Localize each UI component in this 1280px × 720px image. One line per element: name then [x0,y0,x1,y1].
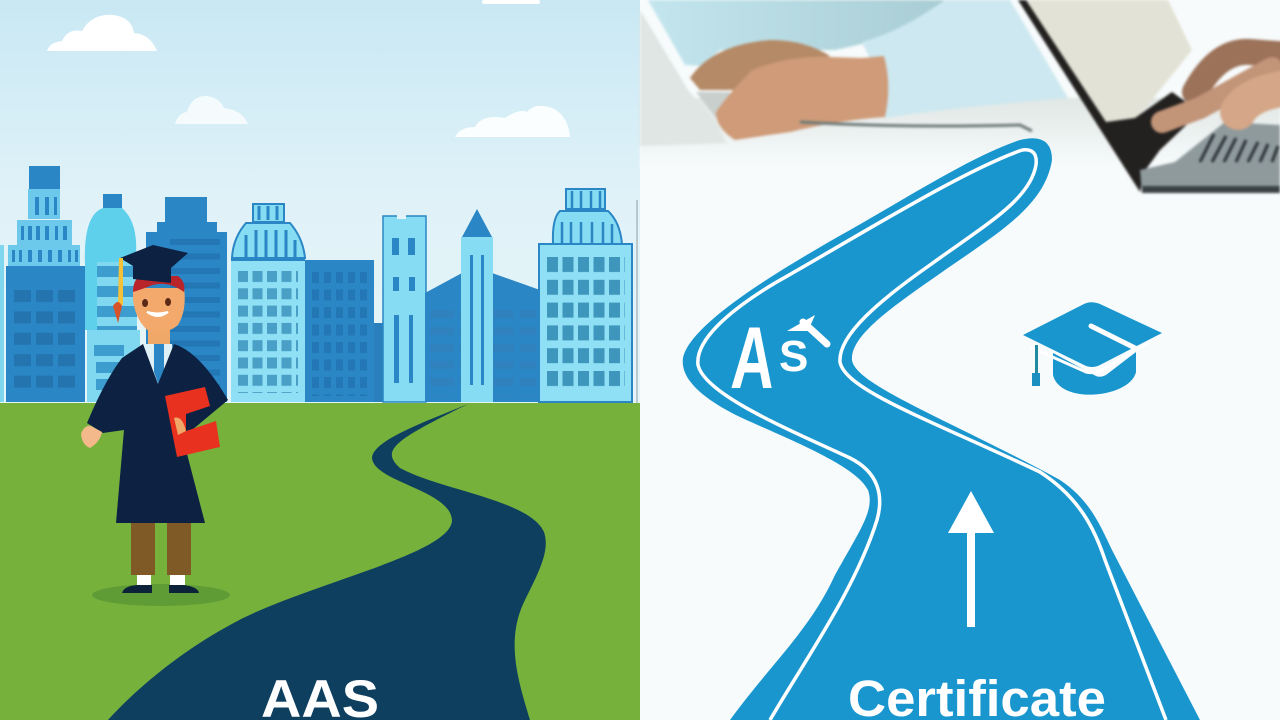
socks [137,575,185,585]
building 8 [539,189,632,402]
road glyph: AS with arrow [729,309,827,407]
icon: graduation cap [1023,302,1162,395]
necktie [154,344,164,386]
winding dark road [108,404,546,720]
building 7 windows [430,310,536,396]
pale background [640,0,1280,720]
right laptop wedge [1018,0,1200,192]
left laptop keyboard sliver [696,92,730,118]
building 7 [425,273,540,402]
right edge line [636,200,638,403]
laptop keyboard base [1140,122,1280,193]
pointed tower [461,209,493,402]
left laptop lid [640,10,726,146]
city skyline [0,166,638,403]
winding blue road [683,138,1200,720]
left sliver building [0,245,4,402]
neck [148,328,170,348]
road glyph: AS with arrow: S [779,332,808,381]
trousers [131,520,191,575]
left hand [81,426,102,448]
building 5 [305,260,384,402]
ground shadow [92,584,230,606]
right laptop screen [1026,0,1192,124]
red book [165,387,220,457]
road up arrow [948,491,994,627]
left hand front [716,56,888,140]
right hand [1162,52,1280,122]
shirt cuff and sleeve [862,0,1068,118]
grass field [0,403,640,720]
road glyph: AS with arrow: A [729,309,777,407]
keyboard keys [1200,134,1278,162]
gown [87,344,228,523]
eyes [142,298,171,307]
shoes [122,585,199,593]
hair [133,276,184,292]
graduate figure [81,245,230,606]
cable [800,122,1032,131]
head [133,288,185,332]
panel: AAS pathway scene [0,0,640,720]
desk photo: hands typing on laptops [640,0,1280,193]
cap tassel [113,258,123,323]
road inner lane line [840,150,1166,720]
building 6 [383,215,426,402]
left hand back fingers [690,40,830,90]
laptop front edge [1142,186,1280,193]
panel: Certificate pathway scene [640,0,1280,720]
table surface [640,98,1280,168]
shirt collar [142,344,174,392]
smile [147,312,168,316]
building 3 [146,197,227,402]
clouds [47,0,570,137]
building 1 [6,166,85,402]
building 2 [85,194,140,402]
building 4 [231,204,305,402]
road outer lane line [698,150,1022,720]
shirt body [648,0,948,66]
sky background [0,0,640,404]
holding hand [174,418,186,435]
mortarboard cap [120,245,188,283]
